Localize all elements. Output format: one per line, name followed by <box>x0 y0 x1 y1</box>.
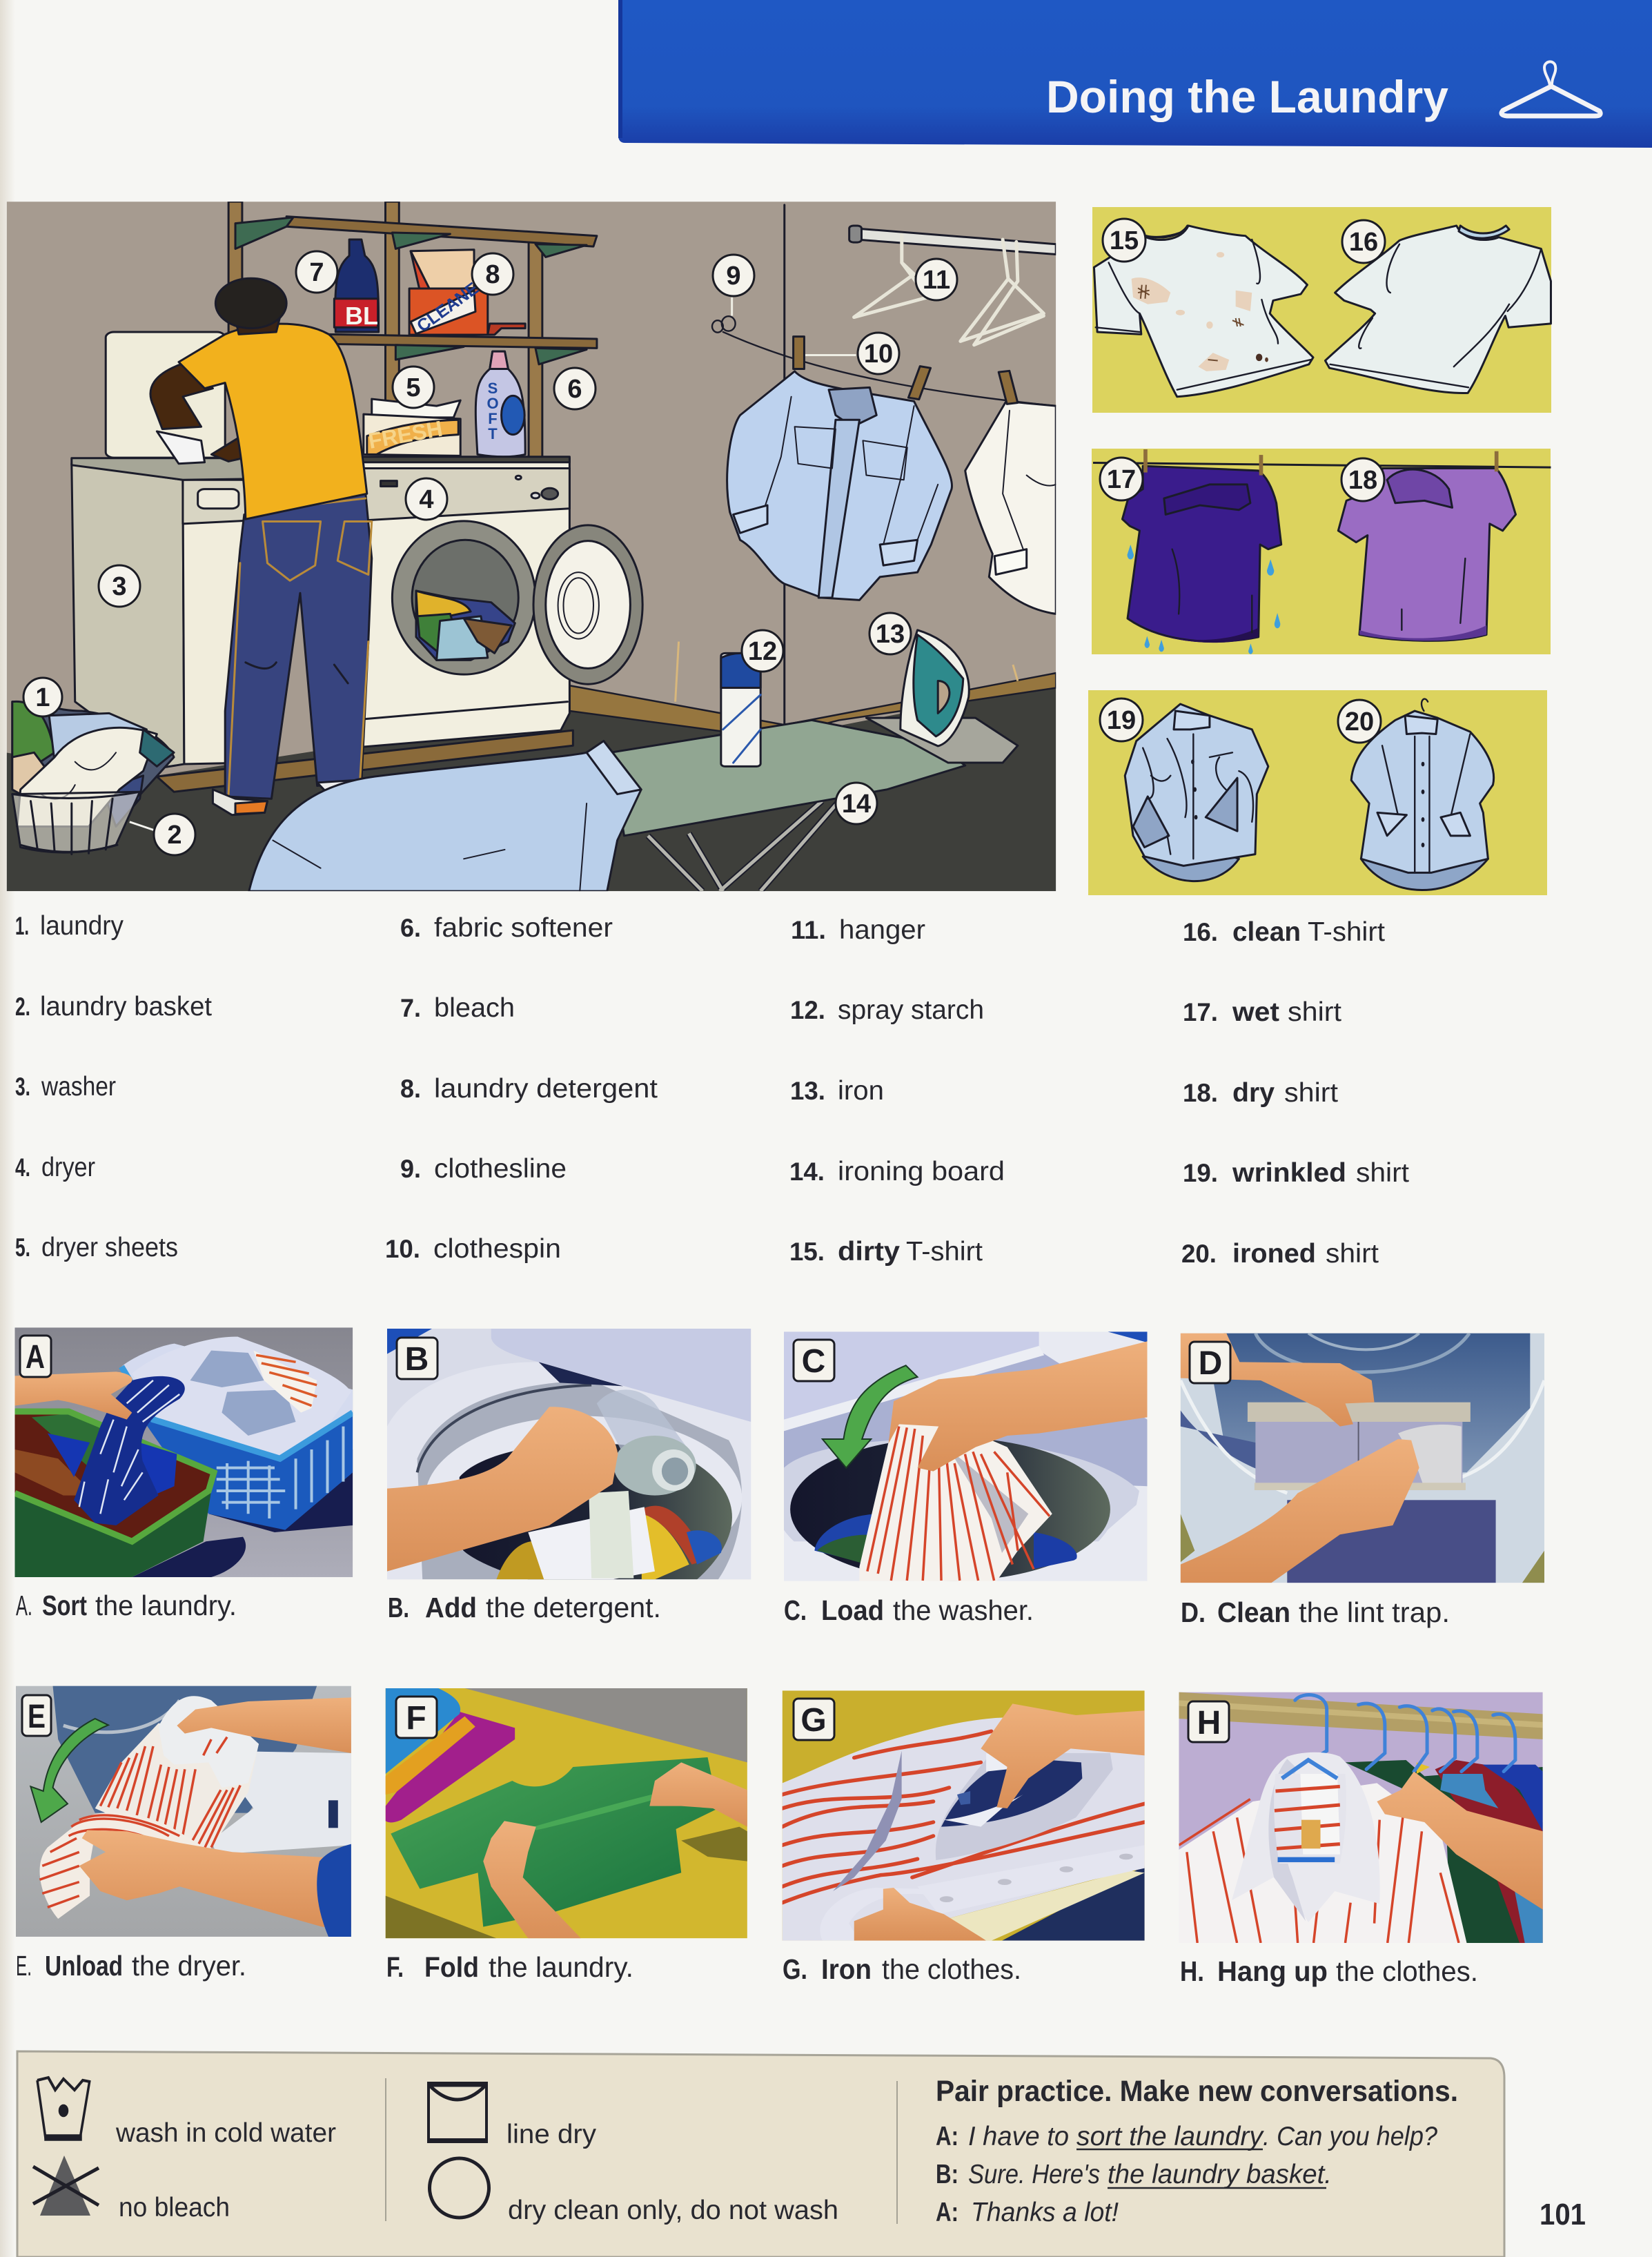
vocabulary list column 2: laundry detergent <box>434 1074 658 1104</box>
number badges on shirt panels: 20 <box>1345 707 1374 736</box>
vocabulary list column 1: dryer sheets <box>41 1233 178 1262</box>
letter badge H <box>1188 1701 1229 1742</box>
step captions row 1 <box>16 1590 1450 1628</box>
number badges on main illustration: 11 <box>923 266 950 295</box>
letter badge A <box>20 1336 51 1377</box>
step captions row 1: Add <box>425 1592 477 1623</box>
step captions row 2: the clothes. <box>882 1953 1021 1985</box>
vocabulary list column 3: dirty <box>838 1237 900 1267</box>
dryer <box>362 457 569 747</box>
panel: care symbols and pair practice <box>17 2051 1504 2257</box>
panel: wrinkled and ironed shirts <box>1088 690 1547 895</box>
step captions row 1: B. <box>388 1592 409 1623</box>
vocabulary list column 4: ironed <box>1232 1239 1316 1269</box>
label: line dry: line dry <box>507 2120 597 2149</box>
panel C: load the washer <box>784 1331 1147 1581</box>
vocabulary list column 2: clothesline <box>434 1154 567 1184</box>
product label text: FRESH <box>366 416 444 453</box>
product label text: O <box>486 395 499 412</box>
panel: wet and dry shirts on a line <box>1092 449 1551 654</box>
vocabulary list column 4: 20. <box>1181 1240 1217 1268</box>
label: dry clean only: dry clean only, do not wash <box>508 2196 838 2225</box>
panel D: clean the lint trap <box>1181 1333 1544 1583</box>
number badges on main illustration: 5 <box>406 373 421 402</box>
step captions row 1: the lint trap. <box>1299 1596 1450 1628</box>
vocabulary list column 3: hanger <box>839 915 925 945</box>
number badges on main illustration: 1 <box>35 683 50 712</box>
detergent box <box>409 250 525 335</box>
vocabulary list column 4: 19. <box>1183 1159 1218 1187</box>
product label text: F <box>488 410 498 427</box>
step captions row 2: H. <box>1180 1955 1204 1987</box>
machine base <box>157 730 573 792</box>
page number: 101 <box>1540 2198 1586 2231</box>
main laundry room illustration <box>6 202 1056 891</box>
step captions row 1: the washer. <box>893 1594 1034 1626</box>
letter badge H: H <box>1197 1705 1221 1741</box>
vocabulary list column 4: shirt <box>1284 1078 1338 1108</box>
vocabulary list column 4: shirt <box>1288 997 1341 1027</box>
vocabulary list column 4: 17. <box>1183 998 1218 1026</box>
vocabulary list column 1: laundry basket <box>40 992 212 1022</box>
icon: dry clean only <box>429 2158 489 2218</box>
step captions row 2: E. <box>16 1950 32 1982</box>
step captions row 1: Clean <box>1217 1596 1290 1628</box>
vocabulary list column 3: 11. <box>791 916 826 944</box>
vocabulary list column 3: 12. <box>790 996 825 1024</box>
conversation: the laundry basket. <box>1108 2160 1332 2189</box>
shelves <box>228 202 597 460</box>
step captions row 1: the detergent. <box>486 1592 661 1623</box>
letter badge B <box>397 1338 437 1379</box>
panel: dirty and clean T-shirts <box>1092 207 1551 413</box>
man's arms and paper <box>150 364 249 464</box>
vocabulary list column 2: 10. <box>385 1235 420 1263</box>
number badges on shirt panels: 15 <box>1110 226 1139 255</box>
letter badge E <box>22 1695 51 1736</box>
fabric softener <box>475 351 525 457</box>
letter badge F: F <box>406 1700 426 1737</box>
step captions row 1: Load <box>821 1594 884 1626</box>
header banner <box>618 0 1652 148</box>
label: wash in cold water: wash in cold water <box>115 2118 336 2148</box>
clothespins <box>794 337 1018 404</box>
letter badge E: E <box>28 1699 46 1735</box>
number badges on shirt panels <box>1100 219 1385 743</box>
vocabulary list column 1: 1. <box>15 912 29 940</box>
product label text: T <box>488 425 498 442</box>
ironing board <box>611 720 965 891</box>
label: no bleach: no bleach <box>119 2193 230 2222</box>
vocabulary list column 4: shirt <box>1356 1158 1409 1188</box>
vocabulary list column 3: iron <box>838 1076 884 1106</box>
step captions row 2: the clothes. <box>1336 1955 1478 1987</box>
number badges on main illustration: 8 <box>485 260 500 289</box>
step captions row 2: Fold <box>424 1951 479 1983</box>
open dryer door <box>533 525 642 684</box>
letter badge G: G <box>800 1702 827 1739</box>
number badges on main illustration: 3 <box>112 572 127 601</box>
spray starch can <box>721 653 760 766</box>
vocabulary list column 4: 18. <box>1183 1079 1218 1107</box>
product label text: CLEANER <box>413 271 492 336</box>
vocabulary list column 2: clothespin <box>433 1234 561 1264</box>
number badges on shirt panels: 19 <box>1107 706 1136 735</box>
icon: hanger <box>1502 61 1600 116</box>
number badges on main illustration: 10 <box>864 340 893 369</box>
hangers <box>854 235 1043 345</box>
number badges on shirt panels: 16 <box>1349 228 1378 257</box>
title: Doing the Laundry <box>1046 71 1448 122</box>
dryer sheets box <box>364 399 460 456</box>
vocabulary list column 4: shirt <box>1326 1239 1379 1269</box>
step captions row 2: G. <box>783 1953 807 1985</box>
iron <box>866 630 1018 763</box>
icon: line dry <box>429 2083 486 2142</box>
vocabulary list column 3 <box>789 915 1005 1267</box>
laundry basket <box>12 701 174 854</box>
product label text: BL <box>345 302 378 330</box>
number badges on main illustration: 12 <box>748 637 777 666</box>
step captions row 1: the laundry. <box>95 1590 237 1621</box>
vocabulary list column 3: 14. <box>789 1157 825 1186</box>
clothesline <box>712 316 1056 406</box>
vocabulary list column 1: 4. <box>15 1153 30 1182</box>
vocabulary list column 3: 15. <box>789 1238 825 1266</box>
shirt draped on ironing board <box>249 741 641 891</box>
vocabulary list column 2 <box>385 913 658 1264</box>
number badges on main illustration: 13 <box>876 620 905 649</box>
baseboard <box>569 673 1056 740</box>
number badges on main illustration: 4 <box>419 485 434 514</box>
letter badge C <box>794 1340 834 1381</box>
number badges on shirt panels: 18 <box>1348 466 1377 495</box>
vocabulary list column 4: 16. <box>1183 918 1218 946</box>
letter badge C: C <box>802 1343 825 1380</box>
bleach bottle <box>334 240 379 332</box>
vocabulary list column 4: dry <box>1232 1078 1275 1108</box>
product label text: S <box>488 380 498 397</box>
panel B: add the detergent <box>387 1329 751 1579</box>
step captions row 1: Sort <box>42 1590 87 1621</box>
letter badge D <box>1190 1342 1230 1383</box>
letter badge A: A <box>26 1339 45 1376</box>
second hanging shirt <box>965 401 1056 614</box>
vocabulary list column 2: 6. <box>400 914 421 942</box>
vocabulary list column 3: 13. <box>790 1077 825 1105</box>
step captions row 2: F. <box>386 1951 404 1983</box>
vocabulary list column 2: 9. <box>400 1155 421 1183</box>
man's jeans <box>213 494 372 815</box>
conversation: I have to <box>968 2122 1069 2151</box>
clothes in the drum <box>416 591 515 660</box>
conversation: B: <box>936 2160 958 2189</box>
number badges on shirt panels: 17 <box>1107 465 1136 494</box>
panel G: iron the clothes <box>783 1690 1145 1941</box>
step captions row 2: Unload <box>45 1950 123 1982</box>
vocabulary list column 1: 5. <box>15 1233 30 1262</box>
step captions row 2: the dryer. <box>132 1950 246 1982</box>
vocabulary list column 3: T-shirt <box>906 1237 983 1267</box>
conversation <box>936 2122 1437 2227</box>
step captions row 1: C. <box>784 1594 807 1626</box>
vocabulary list column 1: laundry <box>40 911 124 941</box>
letter badge D: D <box>1199 1345 1222 1382</box>
number badges on main illustration: 6 <box>567 375 582 404</box>
vocabulary list column 4: T-shirt <box>1308 917 1385 947</box>
number badges on main illustration <box>23 251 957 855</box>
panel H: hang up the clothes <box>1179 1692 1543 1943</box>
man's shirt <box>179 324 367 519</box>
letter badge B: B <box>405 1341 429 1378</box>
step captions row 1: A. <box>16 1590 32 1621</box>
panel E: unload the dryer <box>16 1686 351 1937</box>
vocabulary list column 1: dryer <box>41 1153 95 1182</box>
pair practice heading: Pair practice. Make new conversations. <box>936 2075 1458 2108</box>
letter badge F <box>396 1697 437 1738</box>
vocabulary list column 3: ironing board <box>838 1157 1005 1186</box>
vocabulary list column 1: washer <box>41 1072 116 1102</box>
number badges on main illustration: 9 <box>726 262 741 291</box>
closet rod <box>849 226 1056 254</box>
vocabulary list column 4 <box>1181 917 1409 1269</box>
conversation: A: <box>936 2198 958 2227</box>
hanging shirt <box>727 371 952 600</box>
conversation: Sure. Here's <box>968 2160 1100 2189</box>
step captions row 2: Hang up <box>1217 1955 1328 1987</box>
vocabulary list column 3: spray starch <box>838 995 984 1025</box>
floor <box>6 683 1056 891</box>
man's head <box>215 278 286 334</box>
vocabulary list column 4: wrinkled <box>1232 1158 1346 1188</box>
step captions row 1: D. <box>1181 1596 1206 1628</box>
vocabulary list column 4: clean <box>1232 917 1301 947</box>
step captions row 2 <box>16 1950 1478 1987</box>
washer <box>72 332 249 768</box>
conversation: . Can you help? <box>1263 2122 1437 2151</box>
icon: wash in cold water <box>37 2078 90 2140</box>
vocabulary list column 1 <box>15 911 212 1262</box>
step captions row 2: Iron <box>821 1953 872 1985</box>
panel F: fold the laundry <box>386 1688 747 1938</box>
vocabulary list column 2: 7. <box>400 994 421 1022</box>
vocabulary list column 2: fabric softener <box>434 913 613 943</box>
vocabulary list column 1: 3. <box>15 1073 30 1101</box>
conversation: Thanks a lot! <box>971 2198 1119 2227</box>
vocabulary list column 1: 2. <box>15 993 30 1021</box>
number badges on main illustration: 2 <box>167 821 182 850</box>
conversation: A: <box>936 2122 958 2151</box>
step captions row 2: the laundry. <box>489 1951 633 1983</box>
letter badge G <box>794 1699 834 1740</box>
icon: no bleach <box>33 2156 99 2216</box>
product label text <box>345 271 499 453</box>
vocabulary list column 2: bleach <box>434 993 515 1023</box>
panel A: sort the laundry <box>14 1327 353 1577</box>
number badges on main illustration: 7 <box>309 258 324 287</box>
number badges on main illustration: 14 <box>842 790 871 819</box>
vocabulary list column 2: 8. <box>400 1075 421 1103</box>
conversation: sort the laundry <box>1076 2122 1265 2151</box>
vocabulary list column 4: wet <box>1232 997 1279 1027</box>
